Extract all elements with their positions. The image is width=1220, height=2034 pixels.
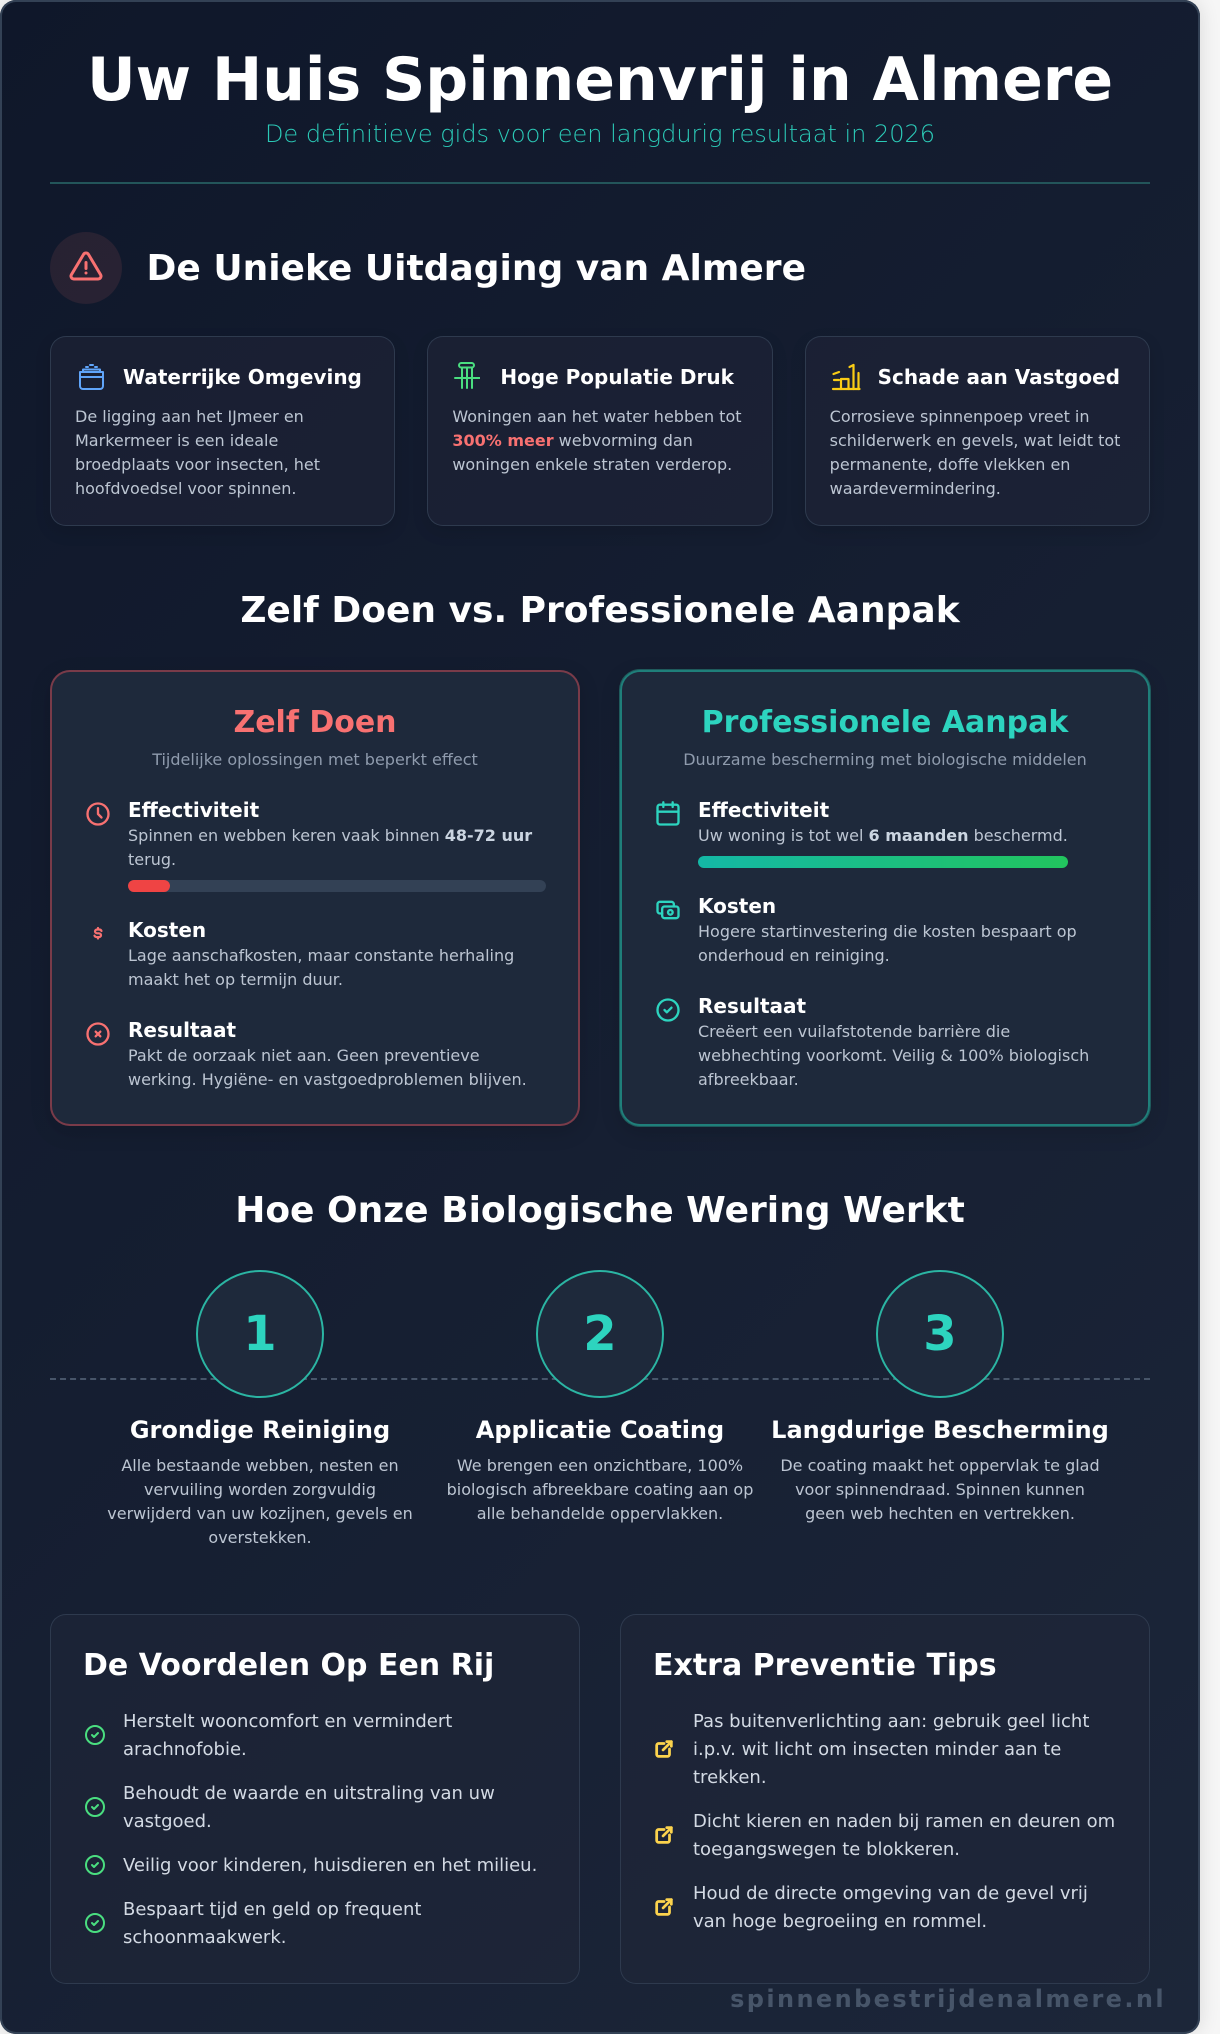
card title: Waterrijke Omgeving	[123, 365, 362, 389]
card text	[452, 407, 742, 474]
panel: zelf doen	[50, 670, 580, 1126]
icon: dollar	[93, 926, 103, 940]
step text: We brengen een onzichtbare, 100%	[457, 1456, 743, 1475]
benefit text	[123, 1899, 421, 1948]
panel: professionele aanpak	[620, 670, 1150, 1126]
row text: Spinnen en webben keren vaak binnen 48-72 uur	[128, 826, 532, 845]
heading: unique challenge: De Unieke Uitdaging van Almere	[146, 248, 806, 289]
row text: werking. Hygiëne- en vastgoedproblemen blijven.	[128, 1070, 527, 1089]
row text	[128, 1046, 527, 1089]
step text	[780, 1456, 1100, 1523]
panel: hoge populatie druk	[427, 336, 773, 526]
row text: Pakt de oorzaak niet aan. Geen preventieve	[128, 1046, 480, 1065]
icon: external link	[655, 1898, 673, 1916]
card text: De ligging aan het IJmeer en	[75, 407, 304, 426]
panel subtitle: Duurzame bescherming met biologische middelen	[683, 750, 1087, 769]
icon: chart	[832, 364, 861, 390]
icon: clock	[86, 802, 110, 826]
title: Uw Huis Spinnenvrij in Almere	[87, 45, 1113, 115]
benefit text	[123, 1783, 495, 1832]
card text: waardevermindering.	[830, 479, 1001, 498]
tip text	[693, 1711, 1089, 1788]
card text: permanente, doffe vlekken en	[830, 455, 1070, 474]
panel heading: Extra Preventie Tips	[653, 1648, 997, 1683]
tip text: trekken.	[693, 1767, 767, 1788]
heading: comparison: Zelf Doen vs. Professionele Aanpak	[240, 590, 960, 631]
step text: biologisch afbreekbare coating aan op	[447, 1480, 753, 1499]
benefit text: schoonmaakwerk.	[123, 1927, 286, 1948]
icon: external link	[655, 1826, 673, 1844]
card text: woningen enkele straten verderop.	[452, 455, 732, 474]
panel heading: De Voordelen Op Een Rij	[83, 1648, 494, 1683]
tip text: Dicht kieren en naden bij ramen en deuren om	[693, 1811, 1115, 1832]
tip text: Pas buitenverlichting aan: gebruik geel licht	[693, 1711, 1089, 1732]
tip text: toegangswegen te blokkeren.	[693, 1839, 960, 1860]
icon: cash	[656, 900, 680, 920]
panel subtitle: Tijdelijke oplossingen met beperkt effect	[152, 750, 478, 769]
panel: benefits	[50, 1614, 580, 1984]
icon: calendar	[656, 801, 680, 826]
progress bar	[698, 856, 1068, 868]
card title: Schade aan Vastgoed	[878, 365, 1120, 389]
step text: geen web hechten en vertrekken.	[805, 1504, 1075, 1523]
number circle	[876, 1270, 1004, 1398]
row title: Kosten	[698, 894, 776, 918]
step text: voor spinnendraad. Spinnen kunnen	[795, 1480, 1085, 1499]
row title: Effectiviteit	[698, 798, 829, 822]
row title: Resultaat	[128, 1018, 236, 1042]
subtitle: De definitieve gids voor een langdurig resultaat in 2026	[265, 120, 935, 148]
row title: Kosten	[128, 918, 206, 942]
row text: terug.	[128, 850, 176, 869]
card text: Woningen aan het water hebben tot	[452, 407, 742, 426]
step text: overstekken.	[208, 1528, 312, 1547]
heading: how it works: Hoe Onze Biologische Wering Werkt	[235, 1190, 965, 1231]
card text: Markermeer is een ideale	[75, 431, 278, 450]
panel: schade aan vastgoed	[805, 336, 1150, 526]
card title: Hoge Populatie Druk	[500, 365, 734, 389]
panel title: Zelf Doen	[233, 705, 397, 740]
step 1	[107, 1270, 413, 1547]
step title: Applicatie Coating	[476, 1416, 724, 1444]
icon: columns	[454, 362, 480, 389]
row text	[698, 922, 1077, 965]
number circle: 3	[923, 1306, 957, 1362]
step text: verwijderd van uw kozijnen, gevels en	[107, 1504, 413, 1523]
benefit text: Bespaart tijd en geld op frequent	[123, 1899, 421, 1920]
tip text	[693, 1883, 1088, 1932]
row text: Uw woning is tot wel 6 maanden beschermd.	[698, 826, 1068, 845]
step 3	[771, 1270, 1109, 1523]
icon: check	[85, 1913, 105, 1933]
panel: waterrijke omgeving	[50, 336, 395, 526]
number circle: 1	[243, 1306, 277, 1362]
number circle: 2	[583, 1306, 617, 1362]
step text: Alle bestaande webben, nesten en	[121, 1456, 399, 1475]
card text: Corrosieve spinnenpoep vreet in	[830, 407, 1090, 426]
icon: warning triangle	[50, 232, 122, 304]
row text: onderhoud en reiniging.	[698, 946, 890, 965]
step text	[447, 1456, 753, 1523]
row text: maakt het op termijn duur.	[128, 970, 343, 989]
progress bar	[128, 880, 546, 892]
row title: Resultaat	[698, 994, 806, 1018]
panel title: Professionele Aanpak	[702, 705, 1068, 740]
step text: alle behandelde oppervlakken.	[477, 1504, 723, 1523]
step text: vervuiling worden zorgvuldig	[144, 1480, 376, 1499]
card text: hoofdvoedsel voor spinnen.	[75, 479, 296, 498]
card text	[830, 407, 1120, 498]
tip text: van hoge begroeiing en rommel.	[693, 1911, 987, 1932]
card text	[75, 407, 320, 498]
number circle	[536, 1270, 664, 1398]
tip text: i.p.v. wit licht om insecten minder aan te	[693, 1739, 1061, 1760]
benefit text: Herstelt wooncomfort en vermindert	[123, 1711, 452, 1732]
tip text	[693, 1811, 1115, 1860]
icon: check	[85, 1725, 105, 1745]
step 2	[447, 1270, 753, 1523]
step text: De coating maakt het oppervlak te glad	[780, 1456, 1100, 1475]
row text: webhechting voorkomt. Veilig & 100% biologisch	[698, 1046, 1089, 1065]
row text: afbreekbaar.	[698, 1070, 799, 1089]
icon: x circle	[86, 1022, 110, 1046]
icon: check	[85, 1797, 105, 1817]
watermark: spinnenbestrijdenalmere.nl	[730, 1985, 1166, 2013]
card text: 300% meer webvorming dan	[452, 431, 693, 450]
benefit text: Behoudt de waarde en uitstraling van uw	[123, 1783, 495, 1804]
benefit text	[123, 1711, 452, 1760]
step title: Grondige Reiniging	[130, 1416, 390, 1444]
card text: broedplaats voor insecten, het	[75, 455, 320, 474]
icon: check circle	[656, 998, 680, 1022]
row text	[128, 946, 514, 989]
icon: check	[85, 1855, 105, 1875]
icon: pot	[79, 364, 104, 390]
row text	[698, 1022, 1089, 1089]
row title: Effectiviteit	[128, 798, 259, 822]
icon: external link	[655, 1740, 673, 1758]
card text: schilderwerk en gevels, wat leidt tot	[830, 431, 1120, 450]
row text: Lage aanschafkosten, maar constante herhaling	[128, 946, 514, 965]
benefit text: vastgoed.	[123, 1811, 212, 1832]
tip text: Houd de directe omgeving van de gevel vrij	[693, 1883, 1088, 1904]
benefit text: arachnofobie.	[123, 1739, 247, 1760]
row text: Hogere startinvestering die kosten bespaart op	[698, 922, 1077, 941]
number circle	[196, 1270, 324, 1398]
step title: Langdurige Bescherming	[771, 1416, 1109, 1444]
benefit text: Veilig voor kinderen, huisdieren en het milieu.	[123, 1855, 537, 1876]
panel: prevention tips	[620, 1614, 1150, 1984]
row text: Creëert een vuilafstotende barrière die	[698, 1022, 1010, 1041]
step text	[107, 1456, 413, 1547]
row text	[128, 826, 532, 869]
